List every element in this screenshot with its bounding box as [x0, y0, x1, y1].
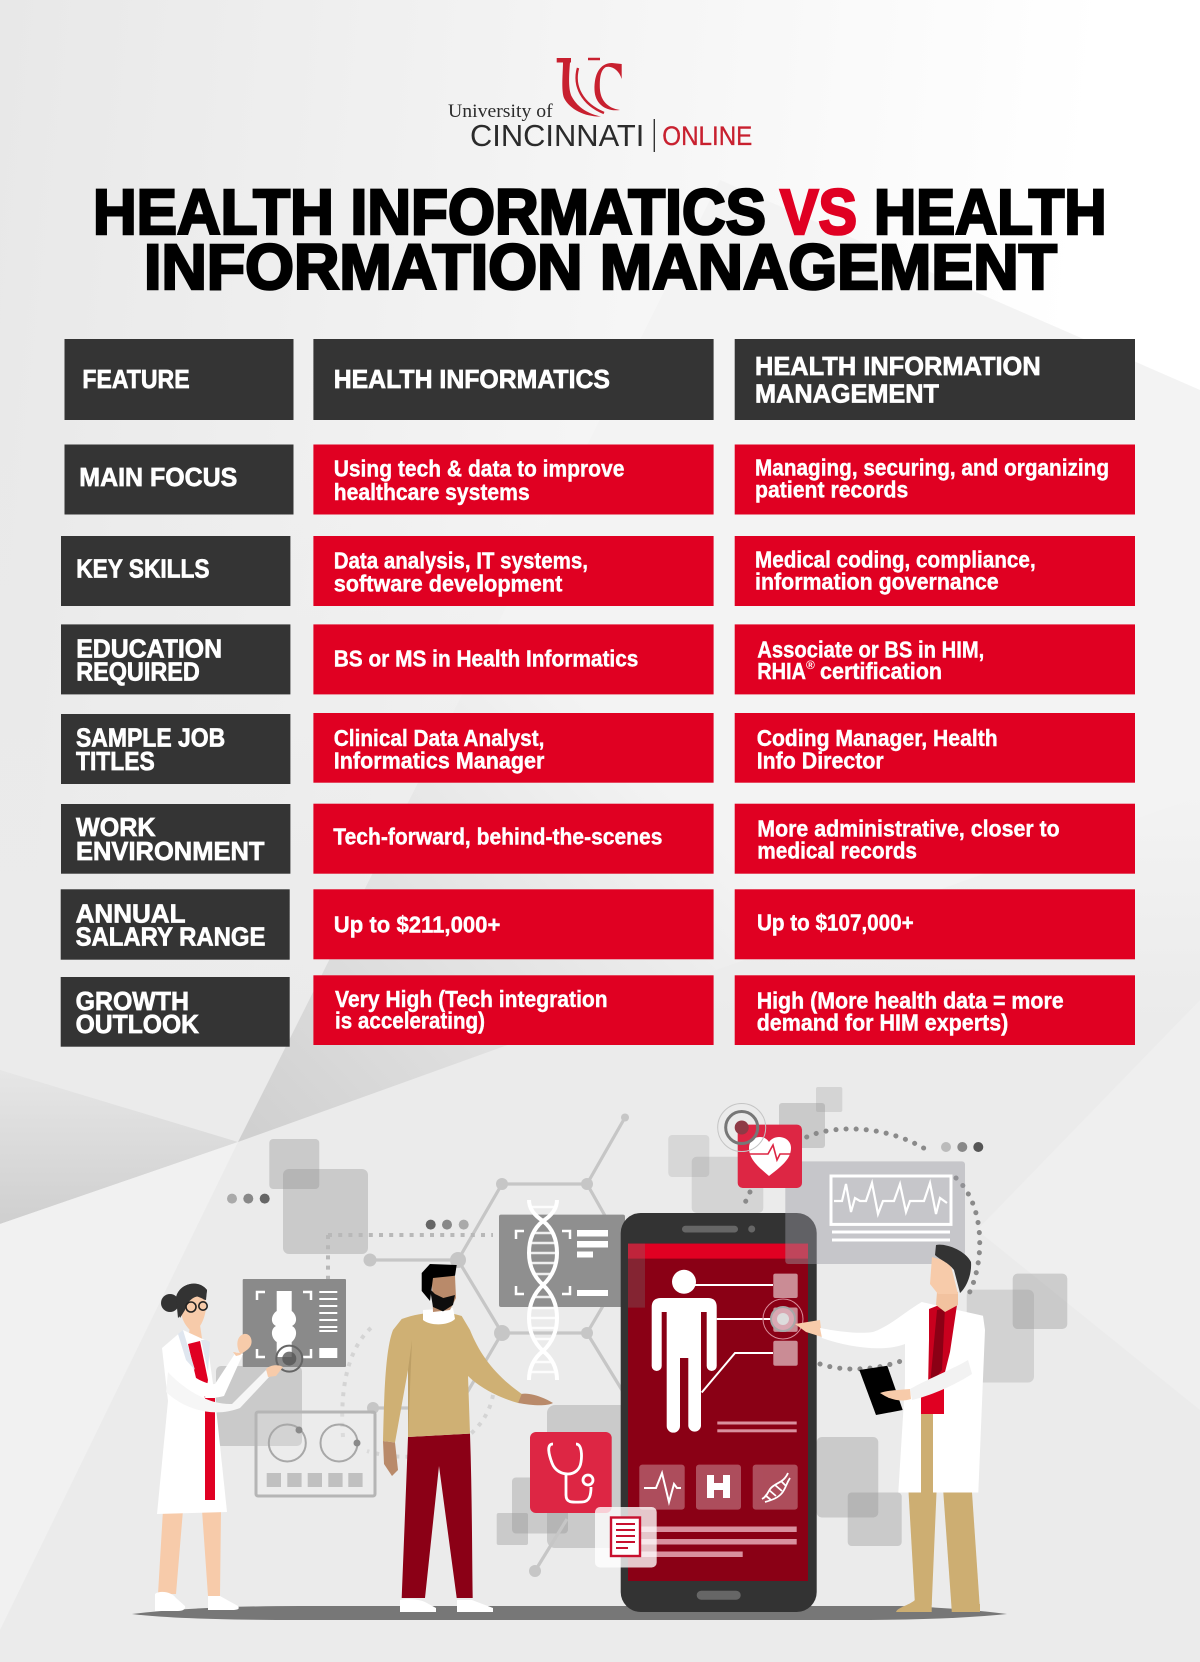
figure: woman doctor	[155, 1284, 283, 1611]
row: work environment: ENVIRONMENT	[76, 836, 265, 866]
figure: male doctor	[795, 1245, 985, 1612]
row: work environment: medical records	[757, 838, 917, 864]
figure: man in sweater	[383, 1264, 553, 1612]
row: education required: BS or MS in Health Informatics	[334, 646, 638, 672]
panel: ECG monitor	[785, 1161, 965, 1264]
row: main focus: Managing, securing, and organizing	[755, 455, 1109, 481]
icon: pulse	[644, 1473, 681, 1502]
row: key skills: software development	[334, 571, 563, 597]
row: education required: REQUIRED	[76, 657, 200, 687]
row: annual salary range: ANNUAL	[76, 898, 186, 928]
icon: human body	[652, 1270, 717, 1433]
row: key skills: Data analysis, IT systems,	[334, 547, 588, 573]
row: education required: ®	[806, 658, 815, 672]
row: key skills: information governance	[755, 568, 999, 594]
title: HEALTH	[874, 176, 1106, 248]
row: growth outlook: demand for HIM experts)	[757, 1009, 1008, 1035]
header: health information management	[735, 339, 1135, 420]
ground shadow	[132, 1606, 1007, 1620]
row: education required: Associate or BS in HIM,	[757, 636, 984, 662]
icon: DNA helix	[529, 1200, 557, 1380]
icon: hospital H	[707, 1475, 730, 1498]
row: work environment: WORK	[76, 812, 156, 842]
row: sample job titles: Coding Manager, Health	[757, 725, 998, 751]
row: education required: RHIA	[757, 658, 806, 684]
logo: University of Cincinnati Online	[448, 58, 752, 153]
header: health information management: HEALTH INFORMATION	[755, 351, 1041, 381]
row: work environment	[61, 804, 1135, 874]
header: feature	[64, 339, 294, 420]
row: work environment: Tech-forward, behind-the-scenes	[333, 823, 662, 849]
header: feature: FEATURE	[82, 364, 190, 394]
title: HEALTH INFORMATICS	[93, 176, 766, 248]
logo: University of Cincinnati Online: University of	[448, 101, 553, 122]
row: annual salary range: Up to $107,000+	[757, 910, 914, 936]
row: annual salary range	[61, 889, 1135, 960]
title: INFORMATION MANAGEMENT	[144, 231, 1057, 303]
row: sample job titles: Clinical Data Analyst,	[334, 725, 544, 751]
panel: control console	[256, 1412, 375, 1496]
background tiles and network	[216, 1087, 1067, 1577]
panel: x-ray	[243, 1279, 346, 1372]
icon: small DNA	[762, 1473, 790, 1502]
row: education required: certification	[820, 658, 942, 684]
row: education required: EDUCATION	[76, 633, 222, 663]
row: sample job titles	[61, 713, 1135, 784]
row: sample job titles: TITLES	[76, 746, 155, 776]
logo: University of Cincinnati Online: ONLINE	[662, 121, 752, 151]
header: health informatics	[313, 339, 714, 420]
row: growth outlook: High (More health data = more	[757, 988, 1064, 1014]
phone	[621, 1213, 817, 1612]
row: sample job titles: Informatics Manager	[334, 747, 544, 773]
row: annual salary range: Up to $211,000+	[334, 912, 500, 938]
row: work environment: More administrative, closer to	[757, 816, 1060, 842]
row: key skills: KEY SKILLS	[76, 554, 210, 584]
title	[93, 176, 1106, 303]
row: growth outlook	[61, 975, 1135, 1047]
header: health informatics: HEALTH INFORMATICS	[334, 364, 610, 394]
row: growth outlook: GROWTH	[76, 986, 189, 1016]
icon: heart tile	[718, 1104, 802, 1188]
row: main focus: Using tech & data to improve	[334, 456, 624, 482]
row: education required	[61, 624, 1135, 694]
row: main focus: MAIN FOCUS	[79, 462, 237, 492]
row: annual salary range: SALARY RANGE	[76, 922, 265, 952]
row: sample job titles: SAMPLE JOB	[76, 723, 225, 753]
icon: UC monogram	[557, 58, 622, 117]
row: sample job titles: Info Director	[757, 747, 884, 773]
row: growth outlook: OUTLOOK	[76, 1009, 199, 1039]
illustration: medical technology scene	[132, 1087, 1067, 1620]
row: main focus: healthcare systems	[334, 479, 530, 505]
logo: University of Cincinnati Online: CINCINNATI	[470, 118, 644, 153]
row: key skills: Medical coding, compliance,	[755, 546, 1036, 572]
panel: DNA	[499, 1200, 625, 1380]
icon: document tile	[595, 1507, 657, 1568]
icon: stethoscope tile	[530, 1432, 612, 1513]
row: growth outlook: Very High (Tech integration	[335, 986, 608, 1012]
title: VS	[780, 176, 857, 248]
row: growth outlook: is accelerating)	[335, 1007, 485, 1033]
header: health information management: MANAGEMENT	[755, 378, 939, 408]
row: key skills	[61, 536, 1135, 606]
row: main focus	[64, 444, 1135, 514]
comparison table	[61, 339, 1135, 1047]
row: main focus: patient records	[755, 476, 908, 502]
